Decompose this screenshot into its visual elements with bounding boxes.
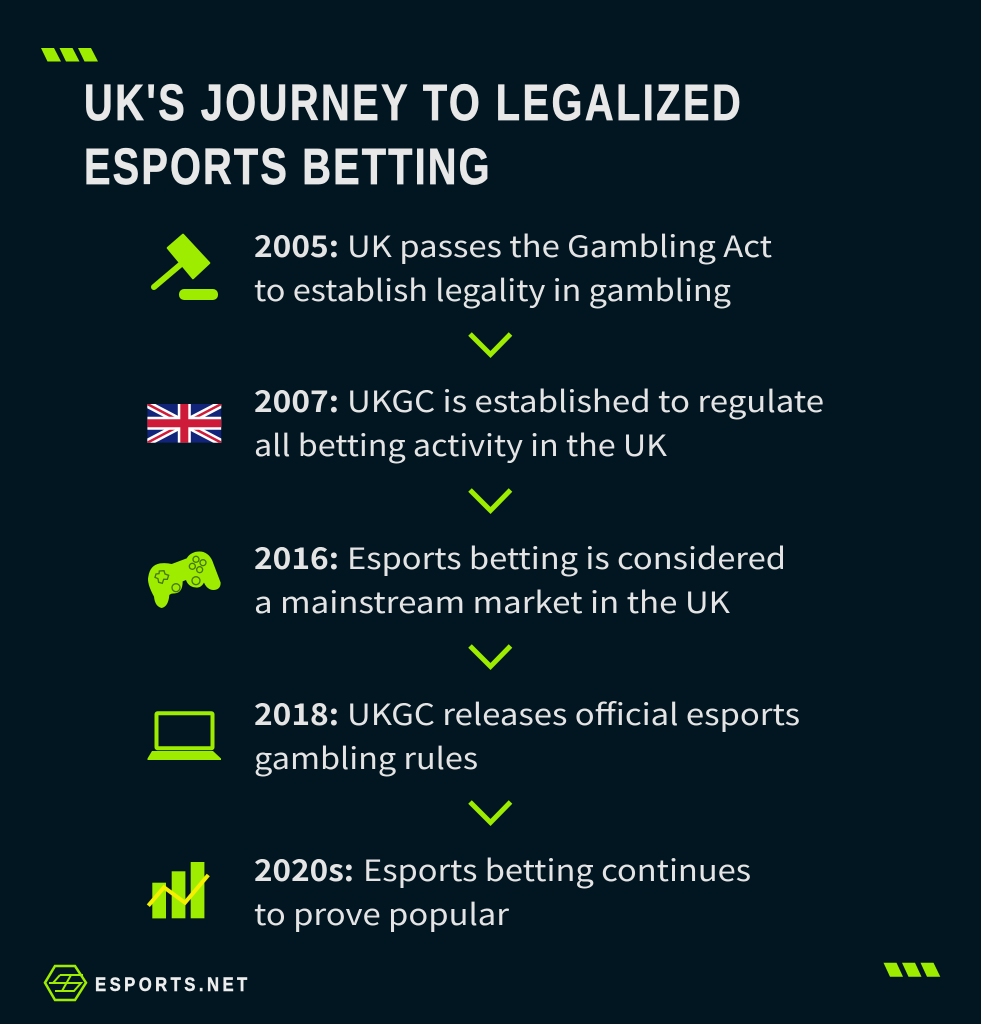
- text: 2016: 2016:: [254, 536, 339, 578]
- text: 2018: gambling rules: [254, 736, 478, 778]
- text: 2020s: Esports betting continues: [363, 848, 751, 890]
- text: 2005: to establish legality in gambling: [254, 268, 731, 310]
- text: 2020s: [254, 848, 751, 934]
- text: 2007: [254, 379, 824, 465]
- icon: UK flag: [147, 404, 222, 443]
- title: ESPORTS BETTING: [84, 138, 490, 195]
- logo: Esports.net: ESPORTS.NET: [95, 974, 247, 995]
- text: 2005: [254, 224, 772, 310]
- arrow 2: [470, 490, 510, 510]
- logo: Esports.net: [45, 966, 247, 1000]
- text: 2007: all betting activity in the UK: [254, 423, 667, 465]
- icon: gavel: [154, 235, 218, 300]
- text: 2016: Esports betting is considered: [347, 536, 786, 578]
- text: 2020s: 2020s:: [254, 848, 354, 890]
- arrow 1: [470, 334, 510, 354]
- icon: game controller: [148, 552, 221, 608]
- text: 2016: a mainstream market in the UK: [254, 580, 730, 622]
- icon: rising bar chart: [148, 862, 208, 918]
- text: 2016: [254, 536, 786, 622]
- text: 2018: UKGC releases official esports: [347, 692, 800, 734]
- text: 2020s: to prove popular: [254, 892, 510, 934]
- text: 2018: 2018:: [254, 692, 339, 734]
- title: UK'S JOURNEY TO LEGALIZED: [84, 74, 741, 131]
- title: [84, 74, 741, 195]
- text: 2005: UK passes the Gambling Act: [347, 224, 772, 266]
- text: 2005: 2005:: [254, 224, 339, 266]
- icon: laptop: [148, 713, 221, 760]
- text: 2007: 2007:: [254, 379, 339, 421]
- top accent stripes: [41, 48, 98, 62]
- text: 2007: UKGC is established to regulate: [347, 379, 824, 421]
- bottom accent stripes: [884, 963, 940, 977]
- arrow 3: [470, 646, 510, 666]
- text: 2018: [254, 692, 800, 778]
- arrow 4: [470, 802, 510, 822]
